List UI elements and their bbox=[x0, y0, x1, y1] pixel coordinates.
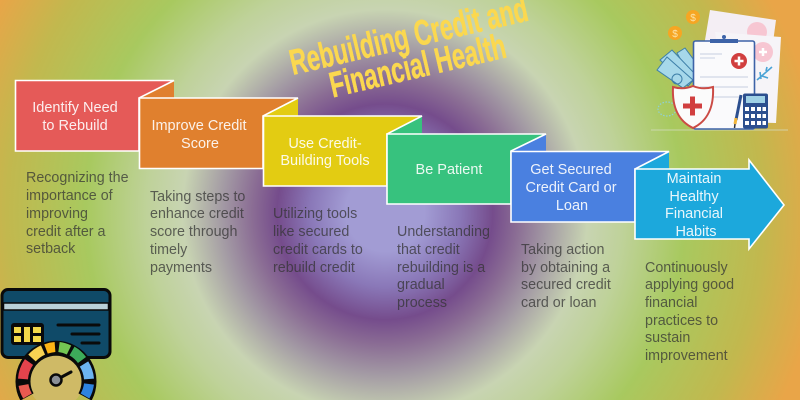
description 5: card or loan bbox=[521, 295, 597, 311]
step 6: Maintain Healthy Financial Habits: Maintain bbox=[667, 171, 721, 187]
icon: medical bill illustration bbox=[651, 10, 788, 130]
description 6: practices to bbox=[645, 313, 718, 329]
description 5: by obtaining a bbox=[521, 260, 610, 276]
banknotes bbox=[677, 48, 705, 85]
step 3: Use Credit-Building Tools: Building Tools bbox=[280, 153, 370, 169]
pen bbox=[736, 95, 741, 120]
coins bbox=[686, 10, 700, 24]
step 3: Use Credit-Building Tools bbox=[264, 116, 422, 186]
description 6: applying good bbox=[645, 277, 734, 293]
step 1: Identify Need to Rebuild: Identify Need bbox=[32, 100, 118, 116]
description 2: enhance credit bbox=[150, 206, 244, 222]
description 6: financial bbox=[645, 295, 697, 311]
description 4: that credit bbox=[397, 242, 460, 258]
description 2: score through bbox=[150, 224, 237, 240]
description 3: rebuild credit bbox=[273, 260, 355, 276]
back papers bbox=[700, 10, 776, 80]
step 6: Maintain Healthy Financial Habits: Healthy bbox=[669, 189, 719, 205]
step 5: Get Secured Credit Card or Loan bbox=[511, 152, 669, 222]
description 3: credit cards to bbox=[273, 242, 363, 258]
description 4: gradual bbox=[397, 277, 445, 293]
description 4: process bbox=[397, 295, 447, 311]
description 1: importance of bbox=[26, 188, 113, 204]
step 6: Maintain Healthy Financial Habits: Financial bbox=[665, 206, 723, 222]
step 2: Improve Credit Score: Improve Credit bbox=[151, 118, 247, 134]
title: Financial Health bbox=[326, 27, 510, 106]
icon: credit card with score gauge bbox=[2, 290, 110, 400]
step 4: Be Patient bbox=[387, 134, 546, 204]
description 2: timely bbox=[150, 242, 188, 258]
step 5: Get Secured Credit Card or Loan: Get Secured bbox=[530, 162, 612, 178]
description 1: improving bbox=[26, 206, 88, 222]
description 6: Continuously bbox=[645, 260, 728, 276]
clipboard bbox=[694, 41, 754, 129]
description 6: sustain bbox=[645, 330, 690, 346]
gauge bbox=[23, 347, 89, 400]
description 4: Understanding bbox=[397, 224, 490, 240]
description 1: Recognizing the bbox=[26, 170, 129, 186]
step 5: Get Secured Credit Card or Loan: Loan bbox=[556, 198, 588, 214]
step 3: Use Credit-Building Tools: Use Credit- bbox=[288, 136, 362, 152]
description 4: rebuilding is a bbox=[397, 260, 485, 276]
description 3: Utilizing tools bbox=[273, 206, 357, 222]
description 3: like secured bbox=[273, 224, 349, 240]
description 2: Taking steps to bbox=[150, 189, 245, 205]
step 2: Improve Credit Score: Score bbox=[181, 136, 219, 152]
calculator bbox=[743, 94, 768, 128]
dotted leaf bbox=[658, 102, 676, 116]
step 1: Identify Need to Rebuild: to Rebuild bbox=[42, 118, 108, 134]
icon: medical bill illustration: $ bbox=[690, 13, 696, 24]
description 2: payments bbox=[150, 260, 212, 276]
shield bbox=[673, 86, 713, 128]
step 5: Get Secured Credit Card or Loan: Credit Card or bbox=[525, 180, 617, 196]
step 6: Maintain Healthy Financial Habits bbox=[635, 160, 784, 249]
description 5: secured credit bbox=[521, 277, 611, 293]
step 4: Be Patient: Be Patient bbox=[416, 162, 482, 178]
step 2: Improve Credit Score bbox=[140, 98, 298, 168]
description 1: credit after a bbox=[26, 224, 106, 240]
description 5: Taking action bbox=[521, 242, 604, 258]
step 6: Maintain Healthy Financial Habits: Habits bbox=[675, 224, 717, 240]
description 1: setback bbox=[26, 241, 76, 257]
description 6: improvement bbox=[645, 348, 728, 364]
icon: medical bill illustration: $ bbox=[672, 29, 678, 40]
step 1: Identify Need to Rebuild bbox=[16, 80, 174, 151]
